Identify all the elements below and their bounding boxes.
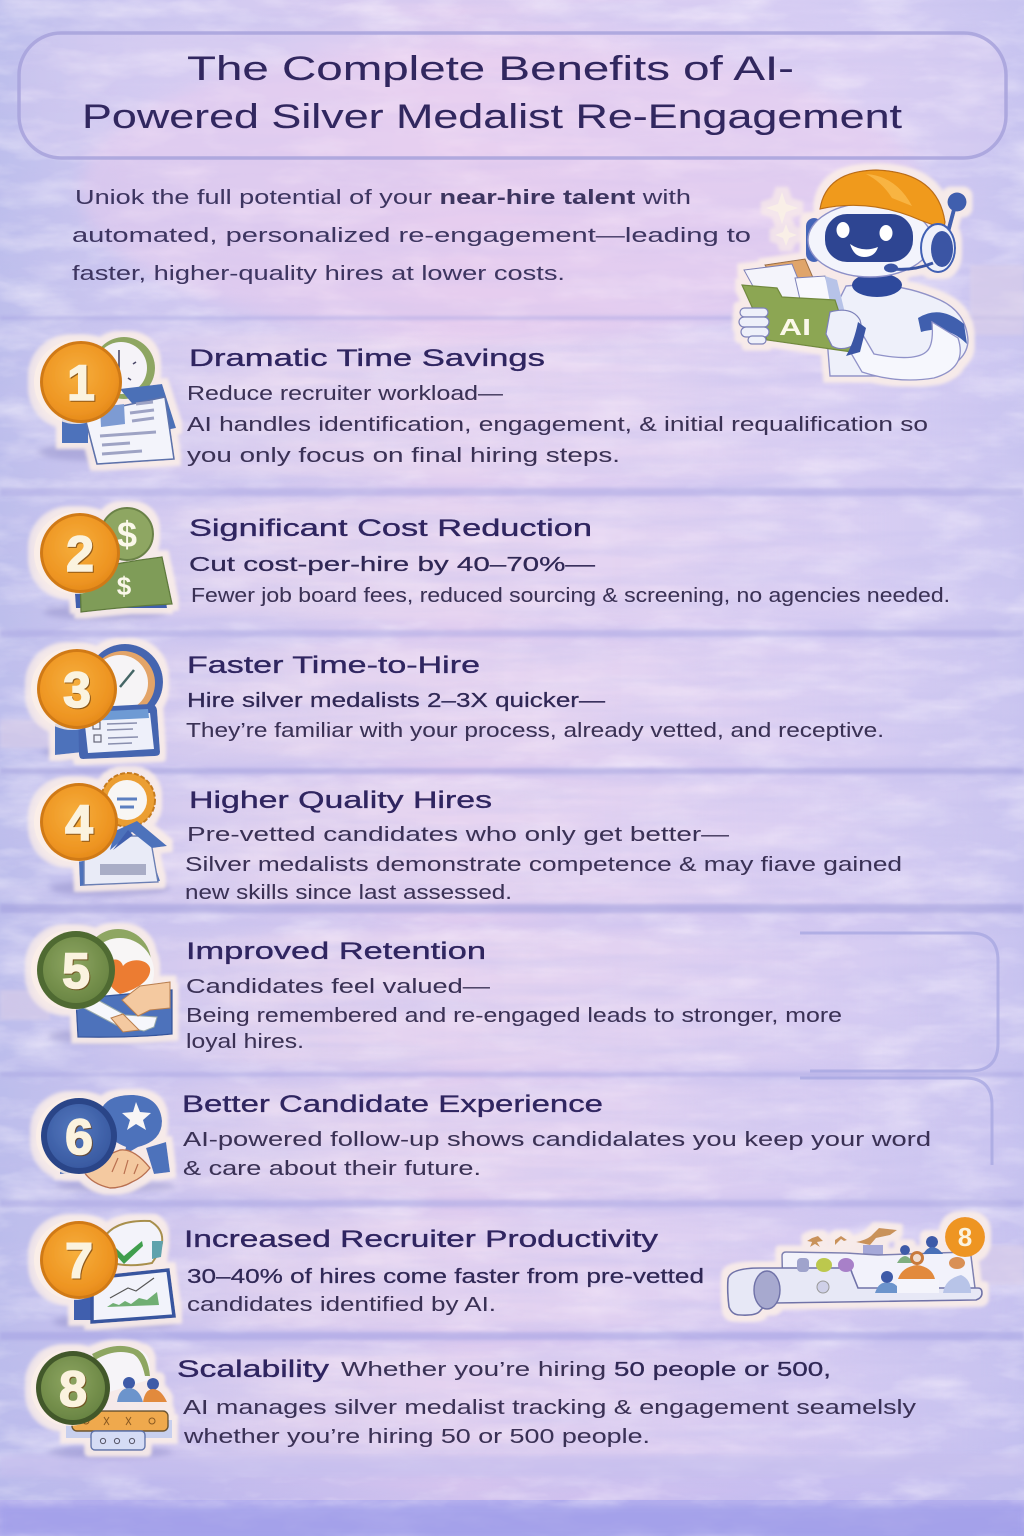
title: Powered Silver Medalist Re-Engagement: [82, 98, 903, 136]
intro text: automated, personalized re-engagement—leading to: [72, 225, 751, 247]
body text: whether you’re hiring 50 or 500 people.: [183, 1425, 650, 1448]
body text: Silver medalists demonstrate competence & may fiave gained: [185, 853, 902, 876]
body text: loyal hires.: [186, 1030, 304, 1053]
number 8 badge: 8: [958, 1222, 972, 1252]
body text: Candidates feel valued—: [186, 975, 491, 998]
icon: checkmark and chart monitor with medal 7: [34, 1220, 174, 1322]
body text: Fewer job board fees, reduced sourcing & screening, no agencies needed.: [191, 584, 950, 607]
heading: Significant Cost Reduction: [189, 515, 592, 542]
number 2: 2: [66, 526, 94, 582]
body text: AI-powered follow-up shows candidalates you keep your word: [183, 1128, 931, 1151]
icon: heart and handshake with medal 5: [31, 929, 172, 1037]
item 6: better candidate experience: [36, 1078, 992, 1188]
heading: Increased Recruiter Productivity: [184, 1226, 658, 1253]
body text: [186, 689, 884, 742]
panel outline: [800, 1078, 992, 1165]
folder label: AI: [779, 314, 811, 340]
title panel: [19, 33, 1006, 158]
body text: [183, 1396, 917, 1448]
body text: [186, 975, 842, 1053]
icon: stopwatch and checklist with medal 3: [31, 644, 163, 759]
icon: coin and banknote with medal 2: [34, 508, 172, 612]
intro text: [72, 187, 751, 285]
number 4: 4: [65, 795, 93, 851]
item 7: increased recruiter productivity: [34, 1217, 985, 1322]
body text: Hire silver medalists 2–3X quicker—: [187, 689, 606, 712]
icon: recruiter dashboard console: [728, 1217, 985, 1315]
intro text: faster, higher-quality hires at lower costs.: [72, 263, 565, 285]
body text: Being remembered and re-engaged leads to stronger, more: [186, 1004, 842, 1027]
body text: 30–40% of hires come faster from pre-vetted: [187, 1265, 704, 1288]
body text: Cut cost-per-hire by 40–70%—: [189, 553, 596, 576]
number 3: 3: [63, 662, 91, 718]
robot mascot with folder: [739, 170, 968, 380]
heading: Better Candidate Experience: [182, 1091, 603, 1118]
icon: coin and banknote with medal 2: $: [117, 571, 132, 601]
panel outline: [800, 933, 998, 1071]
heading: Faster Time-to-Hire: [187, 652, 480, 679]
body text: AI handles identification, engagement, & initial requalification so: [187, 413, 928, 436]
number 8: 8: [59, 1361, 87, 1417]
body text: [185, 823, 902, 904]
body text: [187, 1265, 704, 1316]
icon: clock and document with medal 1: [34, 337, 176, 464]
body text: [189, 553, 950, 607]
item 2: significant cost reduction: [34, 508, 950, 612]
body text: [187, 382, 928, 467]
icon: award rosette and certificate with medal 4: [34, 773, 167, 886]
title: The Complete Benefits of AI-: [187, 50, 794, 88]
body text: Reduce recruiter workload—: [187, 382, 504, 405]
body text: They’re familiar with your process, already vetted, and receptive.: [186, 719, 884, 742]
number 6: 6: [65, 1109, 93, 1165]
heading: Improved Retention: [186, 938, 486, 965]
title: [82, 50, 903, 136]
number 1: 1: [67, 355, 95, 411]
body text: AI manages silver medalist tracking & engagement seamelsly: [183, 1396, 917, 1419]
body text: you only focus on final hiring steps.: [187, 444, 620, 467]
lead-in line: Whether you’re hiring 50 people or 500,: [341, 1358, 831, 1381]
item 8: scalability: [31, 1346, 917, 1450]
icon: team and rating bar with medal 8: [31, 1346, 172, 1450]
item 4: higher quality hires: [34, 773, 902, 904]
number 5: 5: [62, 943, 90, 999]
body text: [183, 1128, 931, 1180]
body text: new skills since last assessed.: [185, 881, 512, 904]
number 7: 7: [65, 1233, 93, 1289]
item 1: dramatic time savings: [34, 337, 928, 467]
title frame: [19, 33, 1006, 158]
icon: coin and banknote with medal 2: $: [117, 514, 137, 555]
body text: candidates identified by AI.: [187, 1293, 496, 1316]
heading: Higher Quality Hires: [189, 787, 492, 814]
heading: Scalability: [177, 1356, 329, 1383]
body text: Pre-vetted candidates who only get better—: [187, 823, 730, 846]
item 5: improved retention: [31, 929, 998, 1071]
icon: speech bubble and handshake with medal 6: [36, 1095, 170, 1188]
intro text: Uniok the full potential of your near-hire talent with: [75, 187, 691, 209]
body text: & care about their future.: [183, 1157, 481, 1180]
item 3: faster time-to-hire: [31, 644, 884, 759]
heading: Dramatic Time Savings: [189, 345, 545, 372]
